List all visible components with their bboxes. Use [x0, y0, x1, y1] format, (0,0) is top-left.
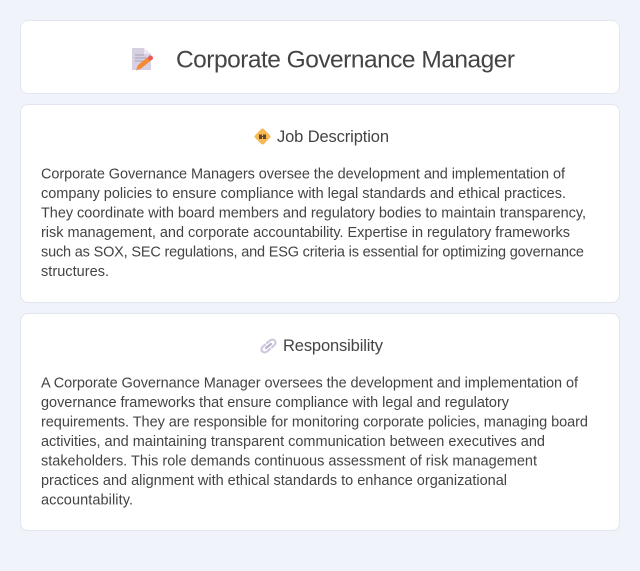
text block: job description: such as SOX, SEC regulations, and ESG criteria is essential for optimizing governance: [41, 245, 584, 261]
panel: title card: [20, 20, 620, 94]
panel: responsibility: [20, 313, 620, 531]
text block: responsibility: accountability.: [41, 493, 133, 509]
text block: responsibility: [41, 376, 588, 509]
panel: job description: [20, 104, 620, 303]
text block: responsibility: activities, and maintaining transparent communication between executives and: [41, 434, 545, 450]
text block: responsibility: practices and alignment with ethical standards to enhance organizational: [41, 473, 507, 489]
text block: responsibility: governance frameworks that ensure compliance with legal and regulatory: [41, 395, 510, 411]
text block: job description: Corporate Governance Managers oversee the development and implementation of: [41, 167, 566, 183]
heading: responsibility: Responsibility: [283, 337, 384, 355]
title: Corporate Governance Manager: [176, 46, 515, 74]
text block: job description: [41, 167, 586, 280]
icon: road sign diamond: [254, 128, 270, 144]
heading: job description: Job Description: [277, 128, 389, 146]
text block: responsibility: stakeholders. This role demands continuous assessment of risk management: [41, 454, 537, 470]
text block: job description: company policies to ensure compliance with legal standards and ethical practices.: [41, 186, 566, 202]
text block: job description: structures.: [41, 264, 109, 280]
text block: job description: risk management, and corporate accountability. Expertise in regulatory frameworks: [41, 225, 570, 241]
text block: responsibility: A Corporate Governance Manager oversees the development and implementation of: [41, 376, 579, 392]
text block: job description: They coordinate with board members and regulatory bodies to maintain transparency,: [41, 206, 586, 222]
icon: document with pencil: [132, 48, 153, 70]
text block: responsibility: requirements. They are responsible for monitoring corporate policies, managing board: [41, 415, 588, 431]
icon: chain link: [260, 338, 277, 354]
